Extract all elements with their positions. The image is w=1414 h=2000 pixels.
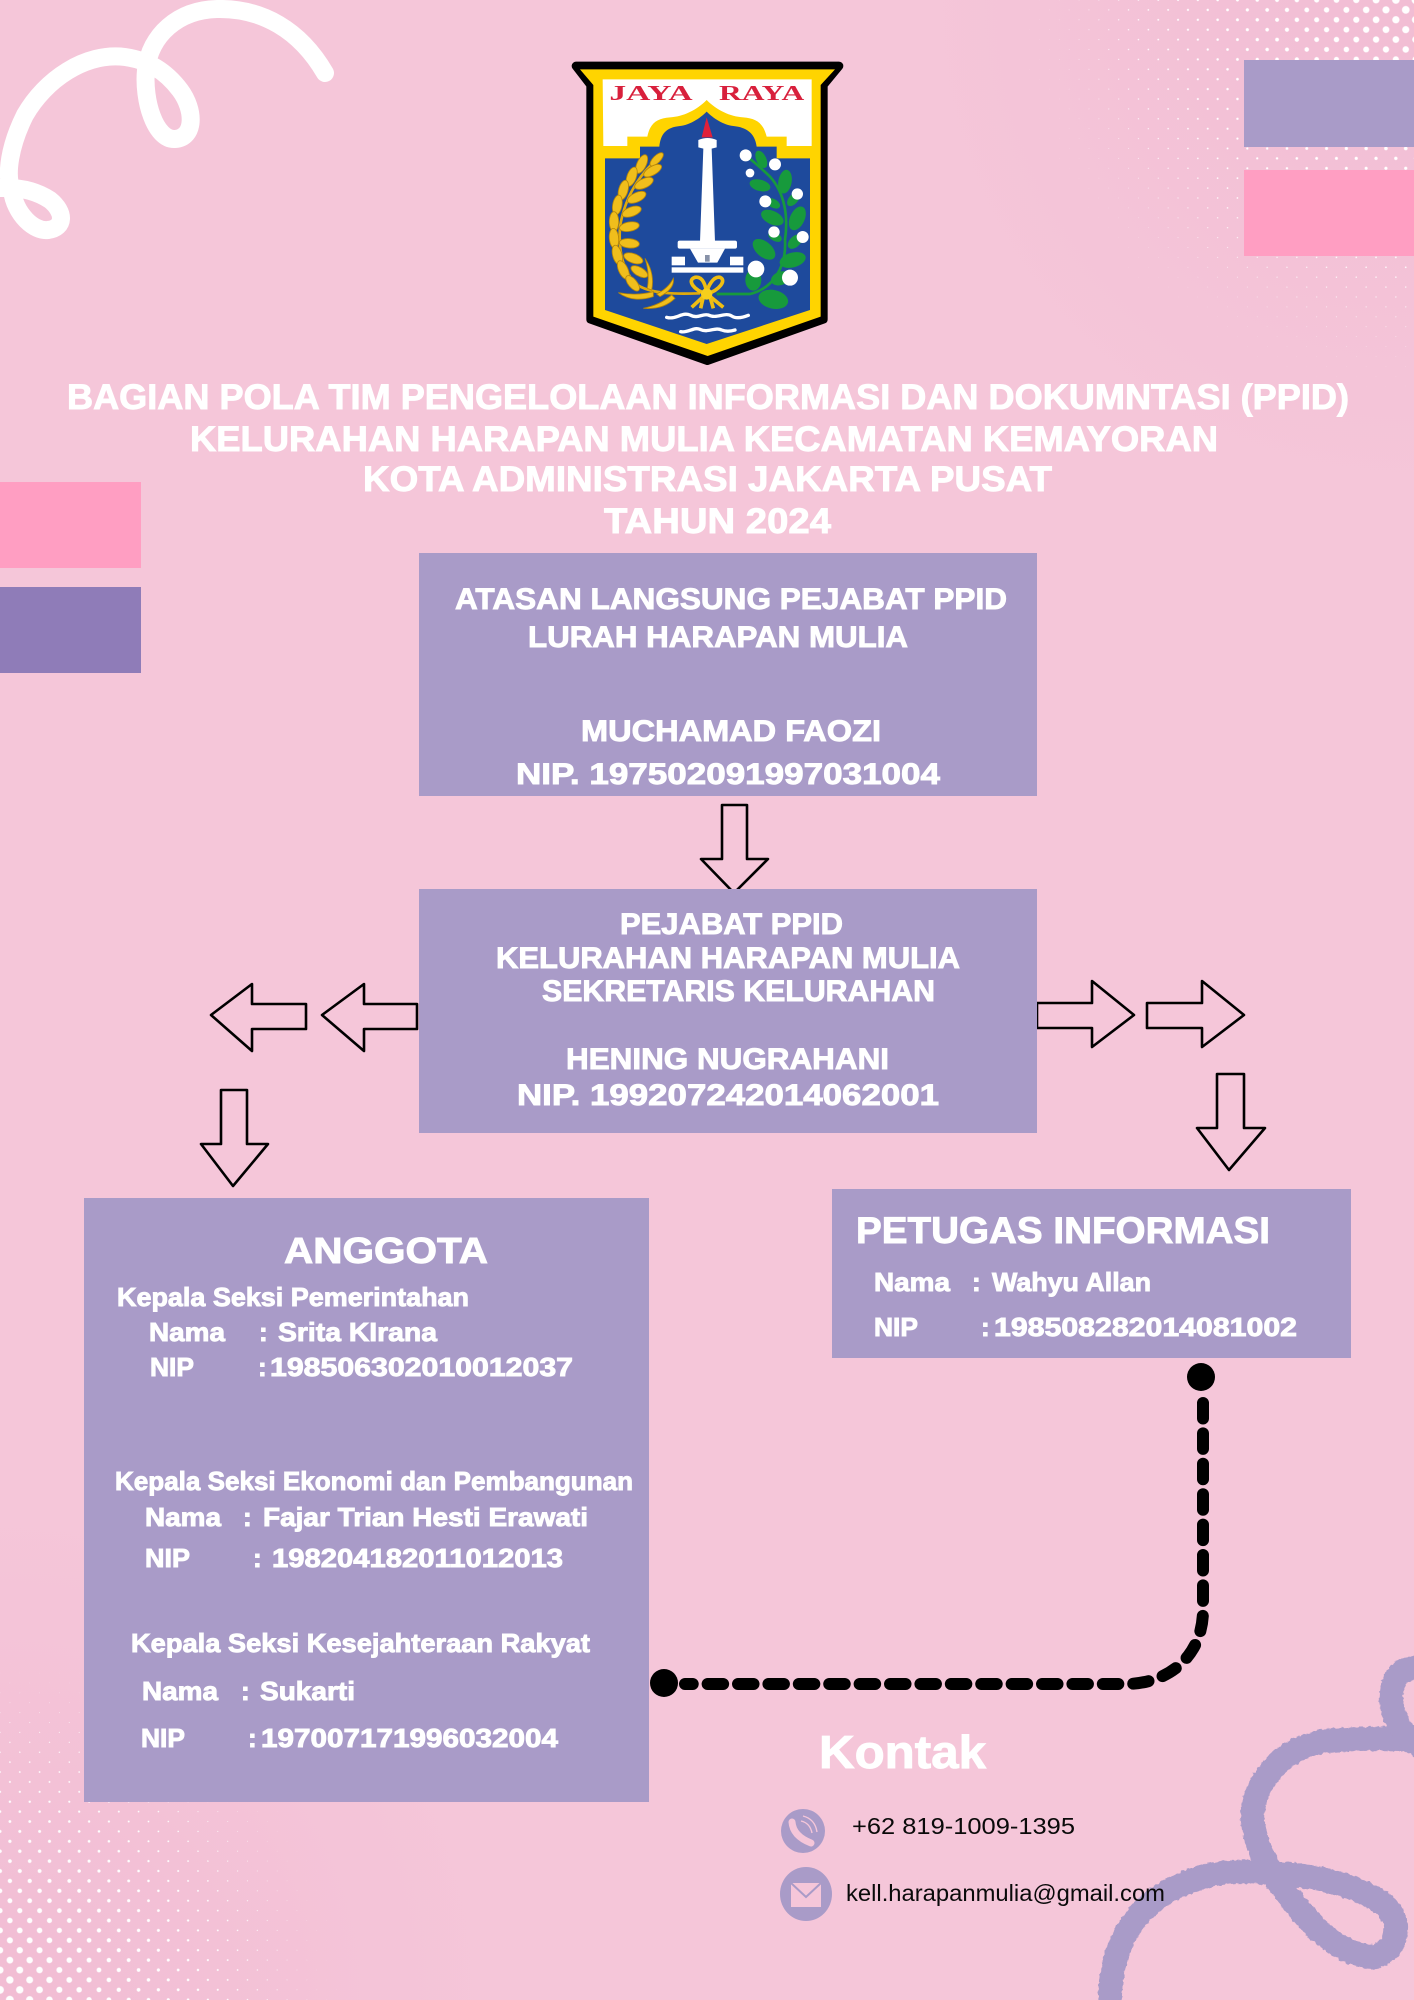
title: KELURAHAN HARAPAN MULIA KECAMATAN KEMAYORAN (190, 419, 1218, 459)
white banner (603, 79, 812, 146)
panel: petugas informasi: Nama (874, 1267, 951, 1297)
member: kesejahteraan rakyat: 197007171996032004 (261, 1723, 559, 1753)
panel: petugas informasi: 198508282014081002 (994, 1312, 1297, 1342)
member: pemerintahan (117, 1282, 573, 1382)
panel: petugas informasi: PETUGAS INFORMASI (856, 1210, 1270, 1251)
panel: anggota (84, 1198, 649, 1802)
member: ekonomi dan pembangunan: NIP (145, 1543, 190, 1573)
arrow: down to anggota (201, 1090, 268, 1186)
panel: pejabat ppid (419, 889, 1037, 1133)
panel: atasan langsung: LURAH HARAPAN MULIA (528, 621, 908, 654)
shield outline (576, 66, 839, 361)
member: kesejahteraan rakyat: NIP (141, 1723, 185, 1753)
title: BAGIAN POLA TIM PENGELOLAAN INFORMASI DAN DOKUMNTASI (PPID) (67, 377, 1349, 417)
arrow: right 2 (1147, 981, 1244, 1047)
member: ekonomi dan pembangunan: 198204182011012013 (272, 1543, 563, 1573)
title: TAHUN 2024 (604, 501, 831, 541)
purple bar left (0, 587, 141, 673)
arrow: left 2 (211, 984, 306, 1051)
motto: RAYA (719, 83, 804, 105)
jasmine branch (717, 149, 809, 312)
member: kesejahteraan rakyat: Nama (142, 1676, 219, 1706)
motto: JAYA (609, 83, 693, 105)
logo: Jakarta coat of arms (576, 66, 839, 361)
rice stalk (608, 151, 700, 309)
anggota heading: ANGGOTA (284, 1230, 488, 1271)
water waves (667, 314, 748, 332)
motto (609, 83, 804, 105)
panel: petugas informasi: Wahyu Allan (992, 1267, 1151, 1297)
member: ekonomi dan pembangunan: : (253, 1543, 262, 1573)
purple brush swirl bottom right (1110, 1668, 1414, 2000)
member: kesejahteraan rakyat: Sukarti (260, 1676, 355, 1706)
panel: pejabat ppid: KELURAHAN HARAPAN MULIA (496, 942, 960, 975)
member: ekonomi dan pembangunan: Kepala Seksi Ekonomi dan Pembangunan (115, 1466, 633, 1496)
phone number: +62 819-1009-1395 (852, 1813, 1075, 1839)
panel: pejabat ppid: PEJABAT PPID (620, 908, 843, 941)
shield gold field (580, 69, 835, 356)
pink bar top right (1244, 170, 1414, 256)
member: ekonomi dan pembangunan: Fajar Trian Hesti Erawati (263, 1502, 588, 1532)
panel: petugas informasi: : (981, 1312, 990, 1342)
dashed connector (650, 1363, 1215, 1697)
panel: petugas informasi: NIP (874, 1312, 918, 1342)
member: pemerintahan: 198506302010012037 (270, 1352, 573, 1382)
member: pemerintahan: : (258, 1352, 267, 1382)
member: ekonomi dan pembangunan: : (243, 1502, 252, 1532)
member: kesejahteraan rakyat: : (248, 1723, 257, 1753)
panel: atasan langsung: ATASAN LANGSUNG PEJABAT PPID (455, 583, 1007, 616)
panel: petugas informasi: : (972, 1267, 981, 1297)
panel: pejabat ppid: SEKRETARIS KELURAHAN (542, 975, 935, 1008)
panel: atasan langsung: MUCHAMAD FAOZI (581, 715, 881, 748)
title: KOTA ADMINISTRASI JAKARTA PUSAT (363, 459, 1052, 499)
member: pemerintahan: Kepala Seksi Pemerintahan (117, 1282, 469, 1312)
email address: kell.harapanmulia@gmail.com (846, 1880, 1165, 1906)
icon: phone (781, 1809, 825, 1853)
monument (672, 117, 743, 273)
member: kesejahteraan rakyat (131, 1628, 590, 1753)
ribbon knot (701, 288, 712, 300)
white swirl decoration (0, 9, 325, 230)
arrow: down to pejabat (701, 805, 768, 893)
panel: pejabat ppid: HENING NUGRAHANI (566, 1043, 889, 1076)
icon: mail (780, 1867, 832, 1921)
member: pemerintahan: Nama (149, 1317, 226, 1347)
member: ekonomi dan pembangunan (115, 1466, 633, 1573)
panel: pejabat ppid: NIP. 199207242014062001 (517, 1079, 939, 1112)
arrow: left 1 (322, 984, 417, 1051)
blue field (605, 112, 810, 344)
title (67, 377, 1349, 541)
member: kesejahteraan rakyat: Kepala Seksi Kesejahteraan Rakyat (131, 1628, 590, 1658)
ribbon (691, 277, 723, 308)
contact heading: Kontak (819, 1726, 986, 1778)
arrow: right 1 (1037, 981, 1134, 1047)
member: pemerintahan: NIP (150, 1352, 194, 1382)
member: ekonomi dan pembangunan: Nama (145, 1502, 222, 1532)
member: kesejahteraan rakyat: : (241, 1676, 250, 1706)
purple bar top right (1244, 60, 1414, 147)
pink bar left (0, 482, 141, 568)
arrow: down to petugas informasi (1197, 1074, 1265, 1170)
panel: atasan langsung: NIP. 197502091997031004 (516, 758, 940, 791)
panel: petugas informasi (832, 1189, 1351, 1358)
member: pemerintahan: Srita KIrana (278, 1317, 438, 1347)
member: pemerintahan: : (259, 1317, 268, 1347)
panel: atasan langsung (419, 553, 1037, 796)
